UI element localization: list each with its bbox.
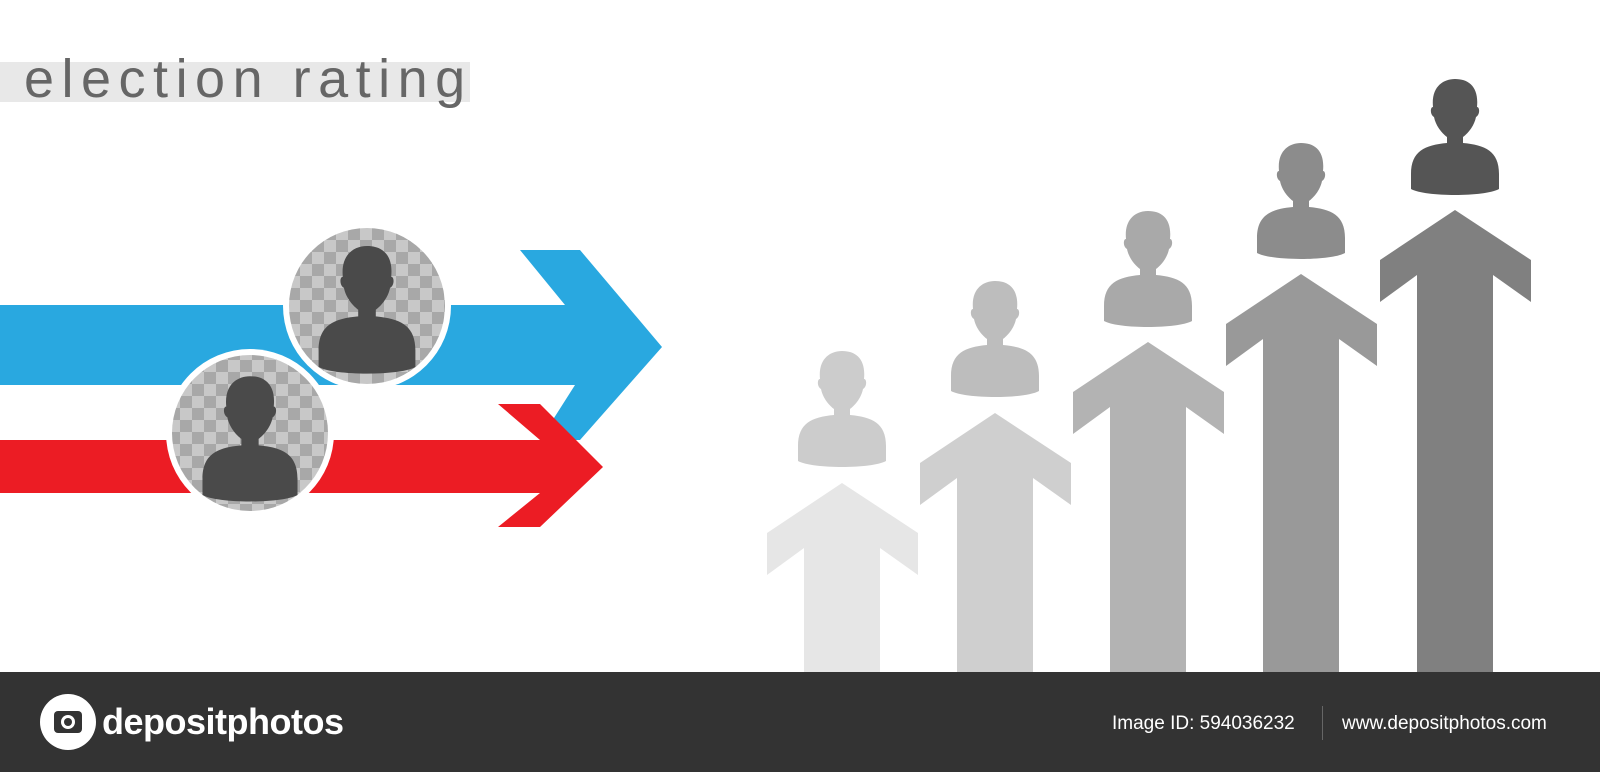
footer logo: depositphotos — [102, 701, 343, 742]
arrow 2 — [920, 413, 1071, 672]
arrow 5 — [1380, 210, 1531, 672]
red arrow — [0, 404, 603, 527]
footer text — [1112, 706, 1547, 740]
title: election rating — [24, 49, 473, 109]
person 5 — [1411, 79, 1499, 195]
footer text: www.depositphotos.com — [1341, 713, 1547, 734]
footer logo — [40, 694, 343, 750]
person 1 — [798, 351, 886, 467]
candidate icon: upper — [283, 222, 451, 390]
rising arrows chart — [767, 79, 1531, 672]
candidate icon: lower — [166, 349, 334, 517]
person 4 — [1257, 143, 1345, 259]
footer bar — [0, 672, 1600, 772]
arrow 4 — [1226, 274, 1377, 672]
arrow 1 — [767, 483, 918, 672]
footer text: Image ID: 594036232 — [1112, 713, 1295, 734]
person 2 — [951, 281, 1039, 397]
blue arrow — [0, 250, 662, 440]
person 3 — [1104, 211, 1192, 327]
arrow 3 — [1073, 342, 1224, 672]
